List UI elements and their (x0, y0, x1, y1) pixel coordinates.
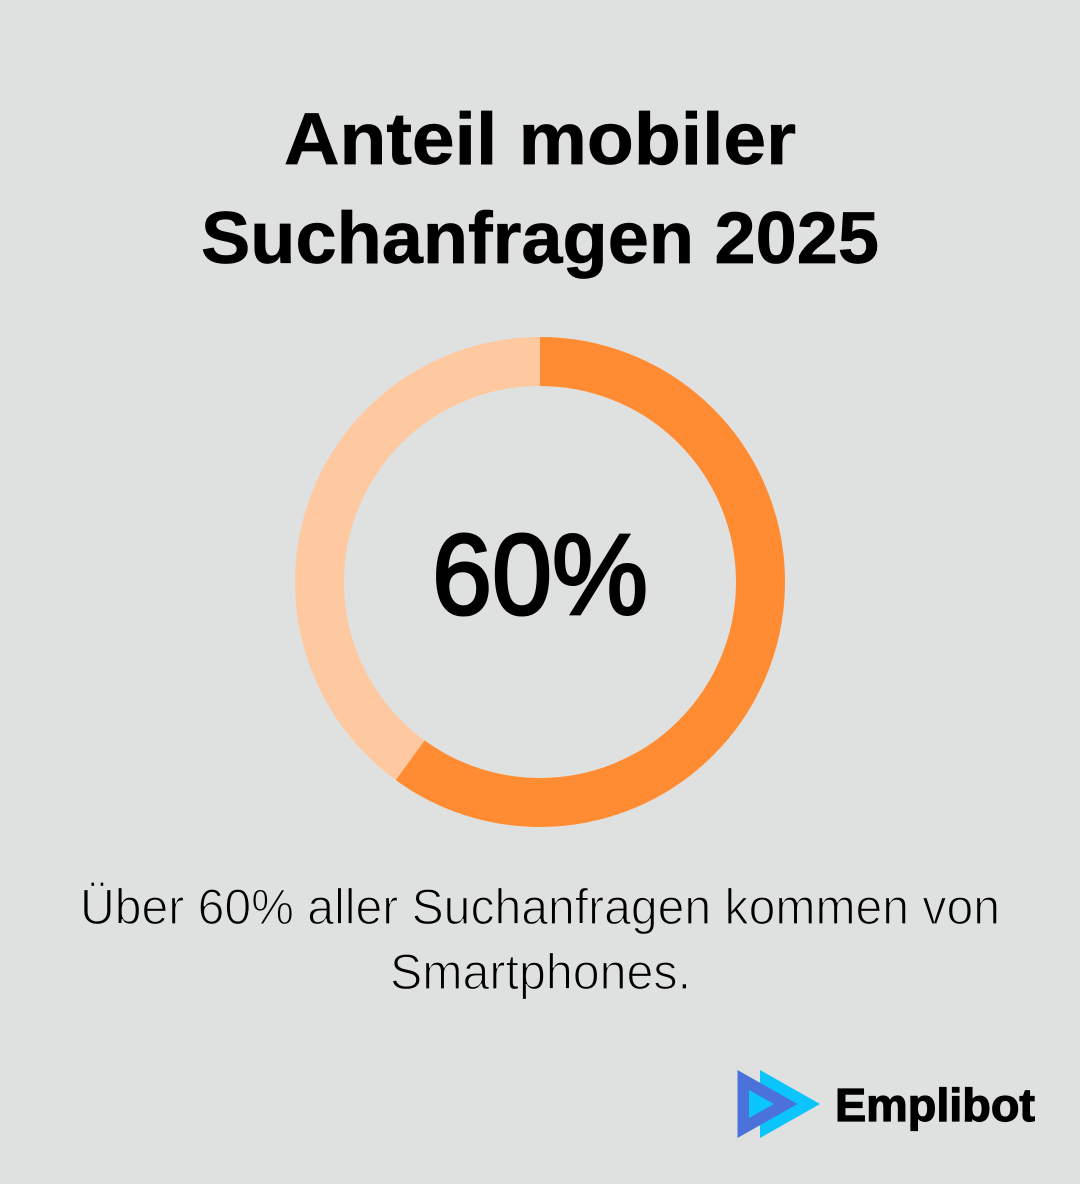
description text: Über 60% aller Suchanfragen kommen von (80, 879, 1000, 935)
center value: 60% (432, 512, 648, 639)
description text (80, 879, 1000, 1000)
title: Anteil mobiler (284, 99, 796, 180)
title (201, 99, 879, 279)
title: Suchanfragen 2025 (201, 198, 879, 279)
description text: Smartphones. (390, 944, 691, 1000)
logo: Emplibot (738, 1070, 1035, 1138)
logo wordmark: Emplibot (835, 1079, 1035, 1131)
donut chart: 60% (320, 362, 760, 802)
icon: play triangles (738, 1070, 820, 1138)
